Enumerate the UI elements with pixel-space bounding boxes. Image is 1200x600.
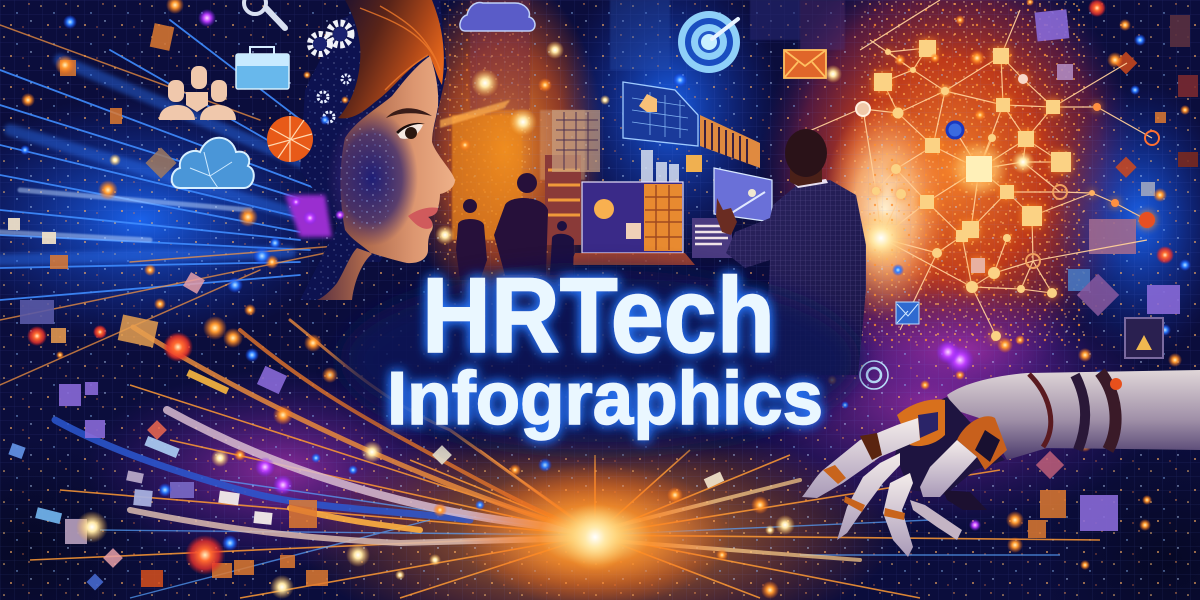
- purple glow panel: [285, 195, 332, 237]
- speed light streaks left: [0, 20, 350, 385]
- title: [387, 255, 823, 440]
- grid building: [552, 110, 600, 172]
- icon: cloud network: [172, 138, 254, 188]
- icon: team of people: [159, 66, 236, 120]
- network ring nodes: [856, 102, 1159, 268]
- face: [317, 56, 455, 300]
- orange note: [686, 155, 702, 172]
- building screens and dashboards: [545, 82, 772, 265]
- suit check texture: [726, 180, 866, 375]
- hair strands: [360, 6, 440, 90]
- network square nodes: [872, 40, 1155, 341]
- lips: [408, 207, 438, 229]
- bar chart: [641, 150, 679, 183]
- building silhouettes behind the scene: [440, 0, 845, 240]
- orange platform: [570, 253, 695, 265]
- icon: gears: [310, 23, 351, 54]
- panel: chart display: [582, 182, 683, 253]
- central burst of light: [460, 463, 730, 600]
- icon: headset ring: [860, 361, 888, 389]
- icon: orange segmented disc: [267, 116, 313, 162]
- icon: small gears: [318, 75, 350, 122]
- hand pointing: [716, 198, 737, 235]
- head sparkles: [300, 0, 447, 300]
- pinky finger: [910, 500, 962, 540]
- index knuckle: [897, 399, 945, 446]
- curved ribbons flowing to the burst: [55, 320, 860, 560]
- orange building panel: [545, 155, 581, 245]
- network links: [800, 0, 1152, 336]
- icon: magnifying glass: [244, 0, 285, 28]
- panel: calendar grid: [623, 82, 698, 146]
- neck: [790, 160, 822, 186]
- ring finger: [883, 473, 913, 557]
- head and neck starfield: [300, 0, 447, 300]
- thumb base: [957, 416, 1007, 470]
- colleagues silhouettes: [456, 173, 574, 280]
- head: [785, 129, 827, 177]
- network graph: [800, 0, 1159, 341]
- title line two: Infographics: [387, 356, 823, 440]
- index glass: [918, 412, 938, 438]
- dark backing behind title: [340, 270, 860, 450]
- woman in profile: [300, 0, 455, 300]
- icons around the head: [159, 0, 351, 237]
- wrist rings: [1029, 372, 1122, 450]
- forearm: [947, 370, 1200, 460]
- starry cheek: [326, 110, 418, 246]
- icon: small envelope: [896, 302, 919, 324]
- white-hot particles: [76, 41, 795, 599]
- index finger: [802, 418, 920, 498]
- panel: line graph display: [714, 168, 772, 222]
- icon: target with arrow: [678, 11, 740, 73]
- panel: text display: [692, 218, 732, 258]
- small claw digit: [943, 490, 987, 510]
- finger joints: [823, 433, 905, 520]
- businessman from behind: [716, 129, 866, 375]
- hair: [338, 0, 444, 118]
- thumb: [920, 440, 977, 497]
- suit jacket: [726, 180, 866, 375]
- eye: [396, 123, 425, 139]
- middle finger: [837, 453, 900, 540]
- eyebrow: [386, 108, 432, 118]
- icon: briefcase: [236, 47, 289, 89]
- icon: cloud top: [460, 2, 535, 31]
- palm: [895, 397, 1005, 495]
- icon: framed triangle card: [1125, 318, 1163, 358]
- title line one: HRTech: [422, 255, 775, 375]
- collar: [794, 179, 828, 188]
- robotic arm and hand: [802, 370, 1200, 557]
- panel: striped building: [700, 115, 760, 168]
- light burst rays: [30, 320, 1100, 598]
- icon: envelope: [784, 50, 826, 78]
- thumb dark joint: [975, 430, 1000, 462]
- purple particles: [198, 9, 981, 531]
- network glow hubs: [824, 65, 1035, 266]
